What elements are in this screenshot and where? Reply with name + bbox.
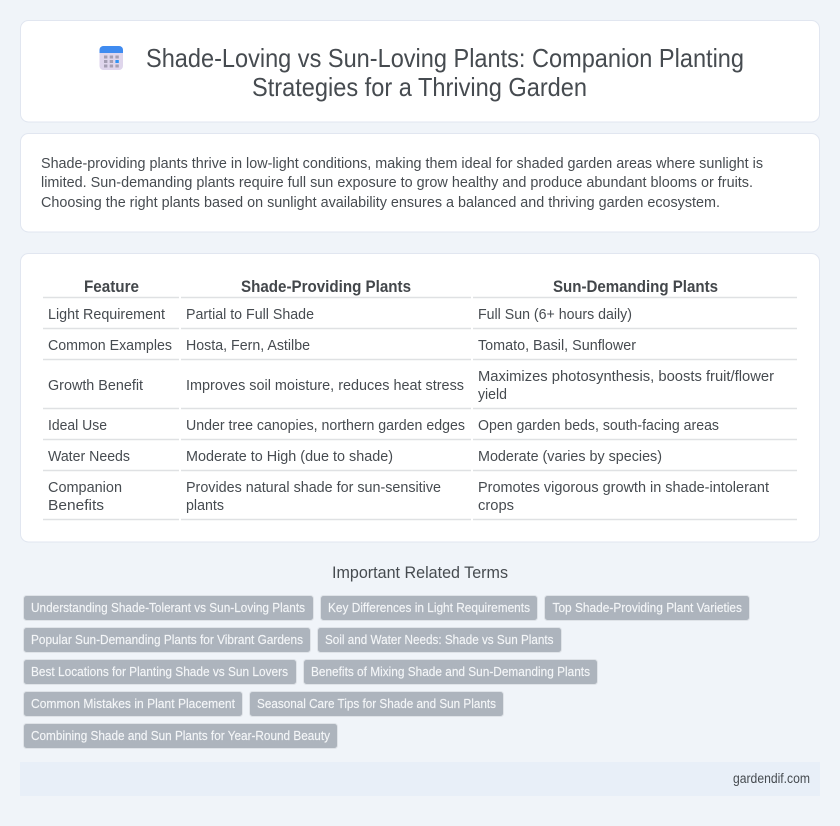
row: companion benefits: plants [186, 498, 224, 514]
tag: Best Locations for Planting Shade vs Sun Lovers [31, 664, 288, 679]
tag [544, 596, 750, 620]
title: Shade-Loving vs Sun-Loving Plants: Companion Planting [146, 43, 744, 73]
row: ideal use: Open garden beds, south-facing areas [478, 418, 719, 434]
panel: header [20, 20, 820, 122]
row: water needs: Moderate (varies by species) [478, 449, 662, 465]
table header: Feature [84, 278, 139, 296]
table header: Shade-Providing Plants [241, 278, 411, 296]
row: light requirement: Partial to Full Shade [186, 307, 314, 323]
row: common examples: Common Examples [48, 338, 172, 354]
row: light requirement: Full Sun (6+ hours daily) [478, 307, 632, 323]
icon: calendar [100, 46, 123, 70]
row: growth benefit: Growth Benefit [48, 378, 143, 394]
tag [320, 596, 538, 620]
row: companion benefits: crops [478, 498, 514, 514]
row: water needs: Moderate to High (due to shade) [186, 449, 393, 465]
tag [318, 628, 562, 652]
row: light requirement [48, 307, 632, 323]
text block: intro paragraph: Choosing the right plants based on sunlight availability ensures a balanced and thriving garden ecosystem. [41, 194, 720, 211]
row: companion benefits: Provides natural shade for sun-sensitive [186, 480, 441, 496]
tag [24, 628, 310, 652]
row: common examples: Hosta, Fern, Astilbe [186, 338, 310, 354]
row: growth benefit: Improves soil moisture, reduces heat stress [186, 378, 464, 394]
heading: important related terms: Important Related Terms [332, 563, 508, 582]
tag [250, 692, 504, 716]
panel: related term tags [24, 596, 750, 748]
text block: intro paragraph [41, 155, 763, 211]
tag [24, 692, 242, 716]
row: companion benefits: Companion [48, 480, 122, 496]
row: common examples [48, 338, 636, 354]
tag: Benefits of Mixing Shade and Sun-Demanding Plants [311, 664, 590, 679]
table header: Sun-Demanding Plants [553, 278, 718, 296]
tag: Soil and Water Needs: Shade vs Sun Plants [325, 632, 554, 647]
row: ideal use: Under tree canopies, northern garden edges [186, 418, 465, 434]
table header [84, 278, 718, 296]
tag [304, 660, 598, 684]
row: growth benefit [48, 369, 774, 403]
row: growth benefit: Maximizes photosynthesis, boosts fruit/flower [478, 369, 774, 385]
tag [24, 596, 314, 620]
tag [24, 660, 296, 684]
text block: intro paragraph: limited. Sun-demanding plants require full sun exposure to grow healthy and produce abundant blooms or fruits. [41, 174, 753, 191]
text block: intro paragraph: Shade-providing plants thrive in low-light conditions, making them ideal for shaded garden areas where sunlight is [41, 155, 763, 172]
tag: Combining Shade and Sun Plants for Year-Round Beauty [31, 728, 331, 743]
row: light requirement: Light Requirement [48, 307, 165, 323]
row: companion benefits: Promotes vigorous growth in shade-intolerant [478, 480, 769, 496]
footer: gardendif.com [733, 771, 810, 786]
title [146, 43, 744, 102]
tag: Seasonal Care Tips for Shade and Sun Plants [257, 696, 496, 711]
row: ideal use: Ideal Use [48, 418, 107, 434]
panel: introduction [20, 134, 820, 232]
panel: comparison table [20, 254, 820, 542]
tag [24, 724, 338, 748]
tag: Top Shade-Providing Plant Varieties [552, 600, 742, 615]
footer [20, 762, 820, 796]
tag: Popular Sun-Demanding Plants for Vibrant Gardens [31, 632, 303, 647]
row: ideal use [48, 418, 719, 434]
row: companion benefits [48, 480, 769, 514]
row: common examples: Tomato, Basil, Sunflower [478, 338, 636, 354]
tag: Key Differences in Light Requirements [328, 600, 530, 615]
tag: Common Mistakes in Plant Placement [31, 696, 235, 711]
row: growth benefit: yield [478, 387, 507, 403]
row: companion benefits: Benefits [48, 498, 104, 514]
tag: Understanding Shade-Tolerant vs Sun-Loving Plants [31, 600, 305, 615]
row: water needs [48, 449, 662, 465]
title: Strategies for a Thriving Garden [252, 72, 587, 102]
row: water needs: Water Needs [48, 449, 130, 465]
